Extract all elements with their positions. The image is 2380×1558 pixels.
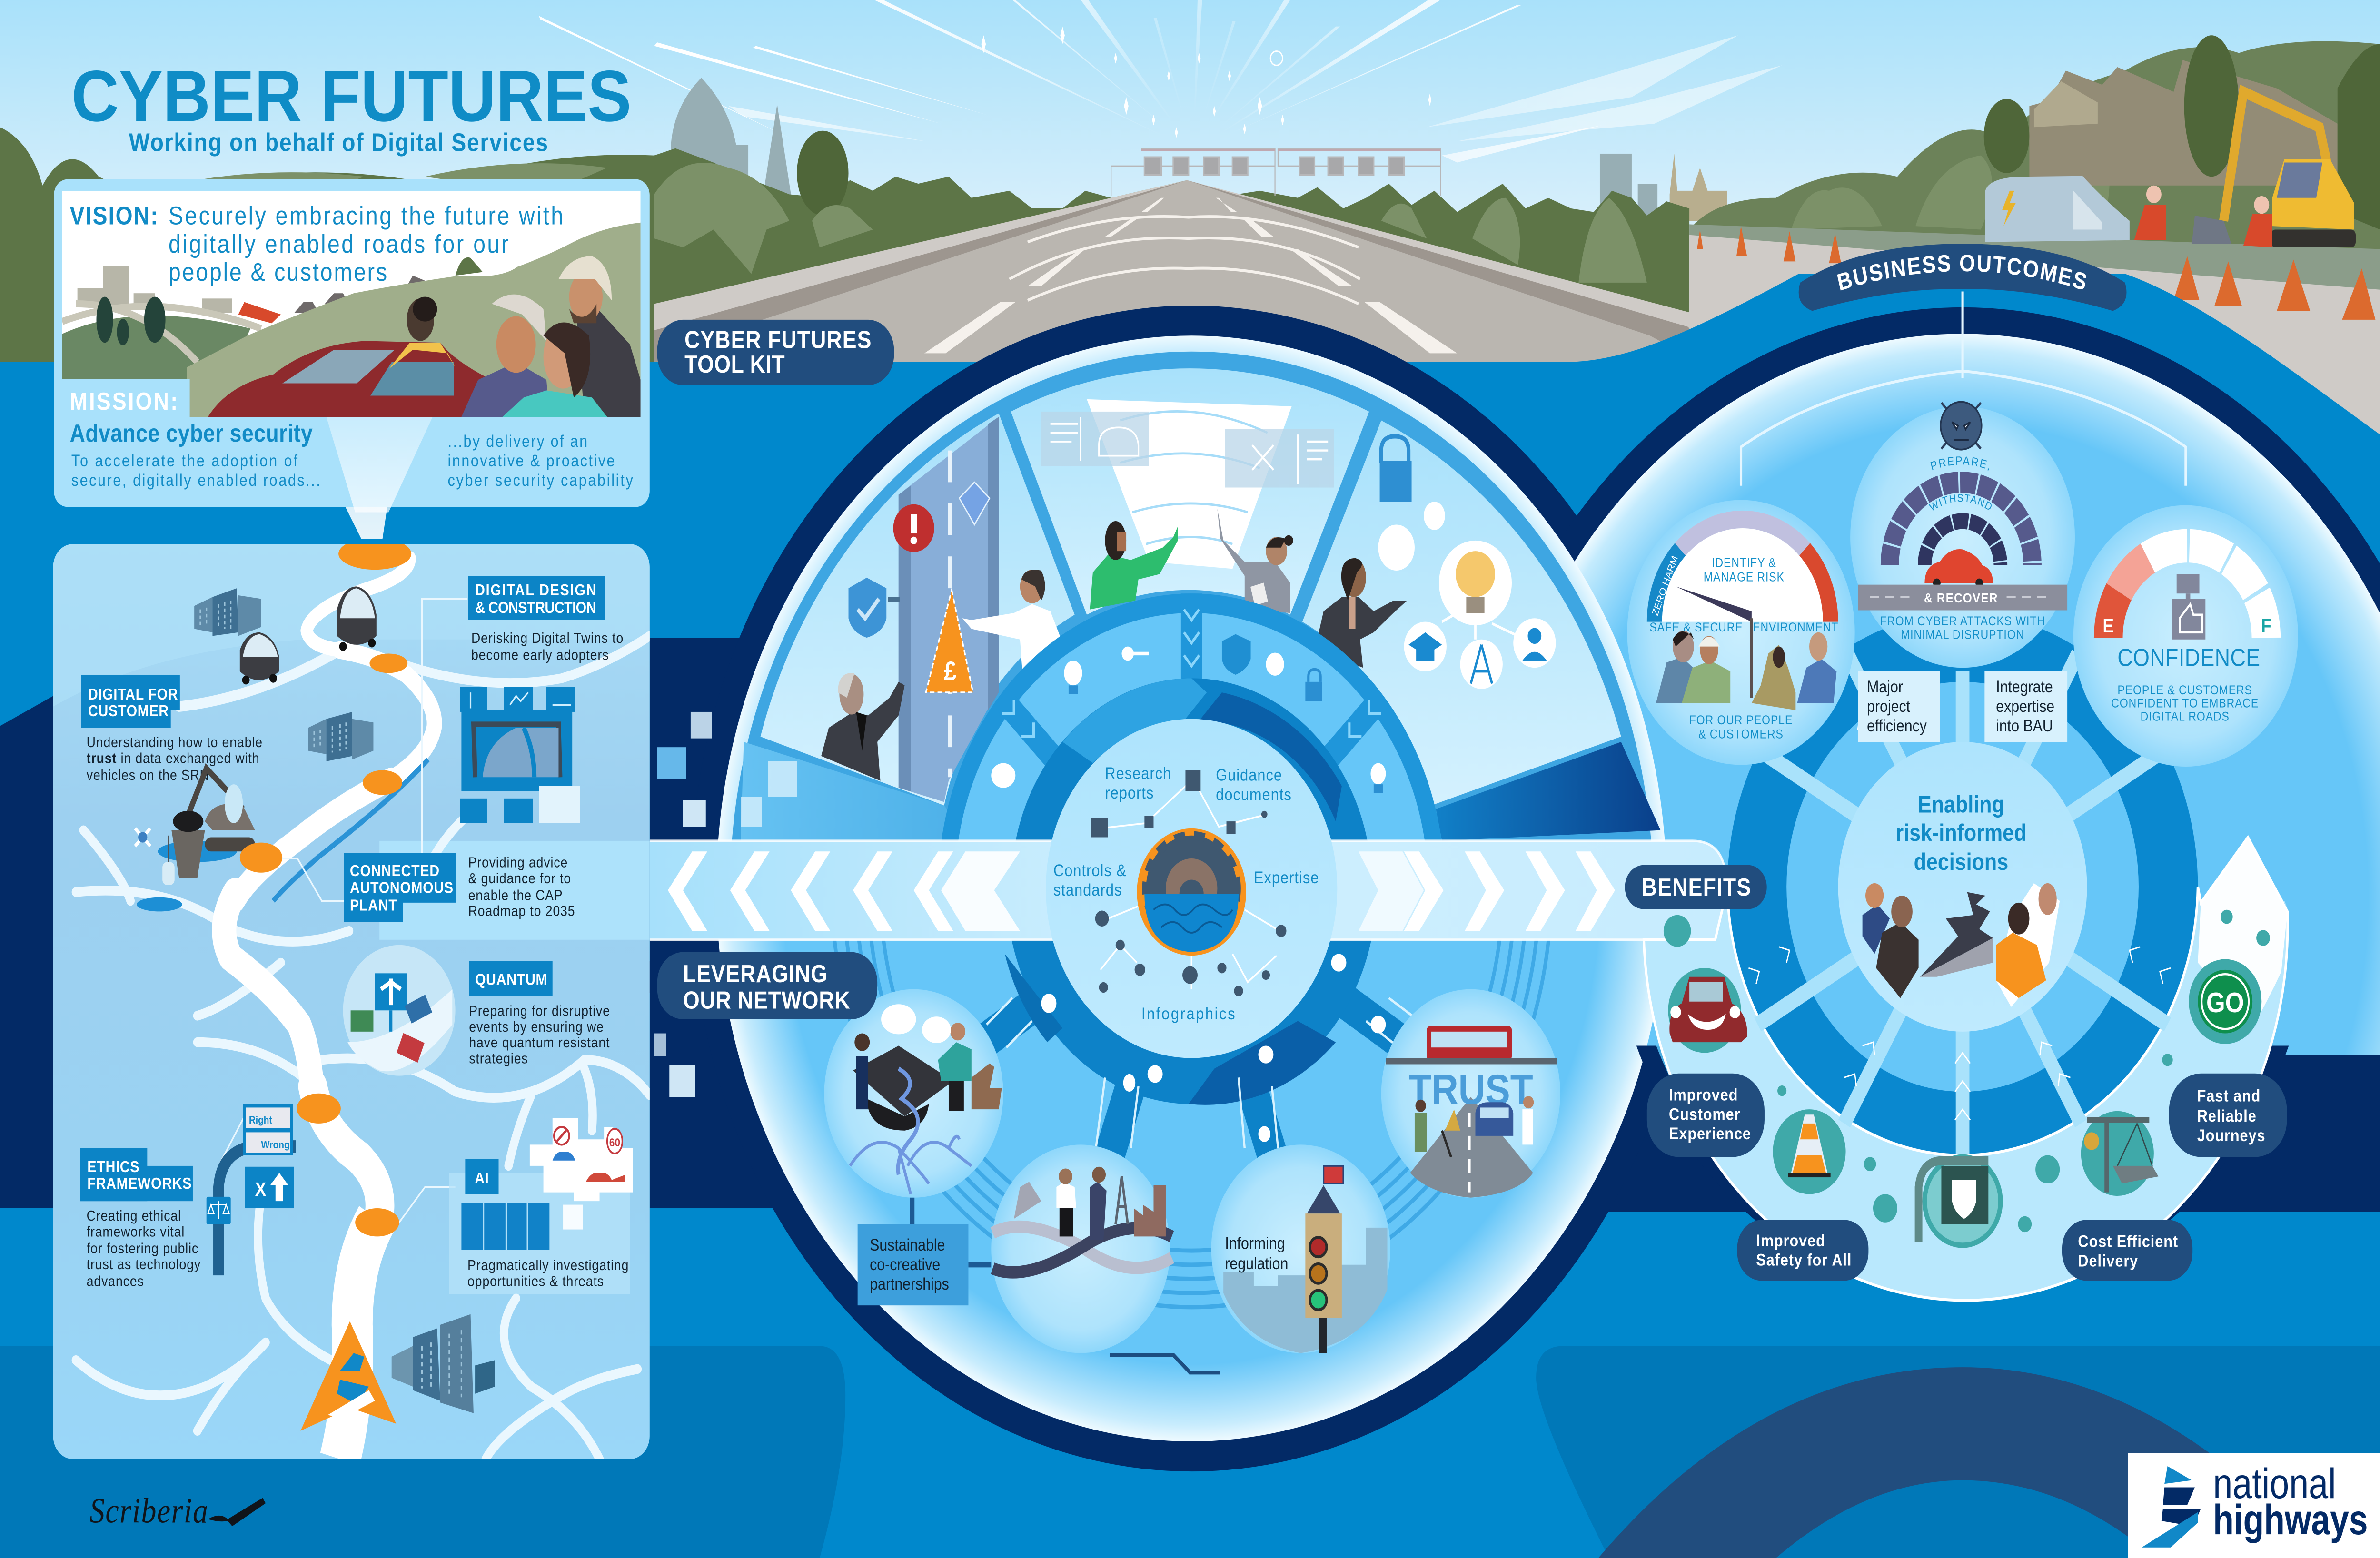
text: CAP roadmap: & guidance for to: [468, 870, 571, 887]
text: mission heading: MISSION:: [70, 388, 178, 415]
illustration: twin model screens: [460, 687, 580, 823]
distant landmarks: dome and spires: [671, 78, 1727, 221]
text: derisking digital twins: become early adopters: [471, 647, 609, 663]
spokes with chevrons: [1758, 653, 2168, 1154]
pill: cost efficient delivery: [2062, 1220, 2192, 1281]
orange route markers: [240, 538, 411, 1236]
pill: cost efficient delivery: Delivery: [2078, 1252, 2138, 1271]
icon: network road roots: [850, 1136, 972, 1194]
box: major project efficiency: efficiency: [1867, 716, 1927, 735]
text: derisking digital twins: Derisking Digital Twins to: [471, 630, 624, 647]
panel: vision and mission: [54, 179, 650, 512]
hub labels: Infographics: [1141, 1005, 1236, 1023]
circle: zero harm gauge: & CUSTOMERS: [1698, 727, 1784, 741]
person: man in dark suit: [821, 682, 905, 781]
panel: left sector, road security: [761, 414, 1075, 806]
illustration: diverse group of people: [1656, 631, 1836, 710]
illustration: quantum junction circle: [343, 945, 456, 1076]
label: leveraging our network: [657, 952, 877, 1019]
circle: confidence gauge: CONFIDENCE: [2117, 644, 2260, 671]
chevron band: [650, 837, 2287, 1264]
benefit icons: [1664, 910, 2270, 1245]
circle: zero harm gauge: MANAGE RISK: [1704, 570, 1785, 584]
icon: mast in circle: [1460, 640, 1503, 689]
right hub structure: decisions: [1914, 848, 2008, 875]
text: mission right: cyber security capability: [448, 471, 633, 489]
bubble: informing regulation: [1211, 1144, 1390, 1353]
connector and box: sustainable partnerships: partnerships: [870, 1274, 949, 1293]
panel: left sector, road security: £: [944, 656, 957, 686]
person: man in white shirt: [962, 604, 1064, 680]
icon: white pixel cloud: [530, 1118, 633, 1201]
pill: improved customer experience: Experience: [1669, 1124, 1751, 1144]
circle: confidence gauge: E: [2103, 616, 2114, 637]
hub labels: reports: [1105, 784, 1154, 802]
white route connectors: [218, 599, 467, 1223]
text: quantum strategies: strategies: [469, 1051, 528, 1067]
circle: zero harm gauge: ENVIRONMENT: [1753, 620, 1838, 634]
icon: tower with traffic light: [1305, 1213, 1342, 1318]
pill: improved customer experience: Improved: [1669, 1085, 1738, 1104]
right-pointing chevrons: [1359, 851, 1615, 931]
sky light rays: [539, 0, 1782, 163]
box: major project efficiency: Major: [1867, 677, 1903, 696]
icon: graduation cap in circle: [1404, 622, 1447, 671]
navigation arrow with logo: [300, 1321, 396, 1431]
text: vision statement: VISION:: [70, 201, 158, 230]
decorative teal dots: [1664, 910, 2270, 1232]
circle: prepare withstand recover: MINIMAL DISRUPTION: [1901, 628, 2024, 642]
circle: confidence gauge: DIGITAL ROADS: [2141, 710, 2230, 724]
van: [1985, 176, 2130, 242]
icon: traffic cone: [1773, 1109, 1846, 1194]
panel: roadmap: [53, 538, 650, 1459]
person: woman in grey pointing: [1217, 509, 1290, 613]
benefit road ring: [1644, 837, 2288, 1301]
node network lines: [1099, 779, 1279, 989]
icon: bus on bridge: [1427, 1026, 1512, 1060]
circle: confidence gauge: [2073, 505, 2298, 767]
text: ethical frameworks: trust as technology: [87, 1256, 201, 1273]
text: quantum strategies: Preparing for disruptive: [469, 1003, 610, 1019]
beam from vision panel to roadmap: [300, 417, 401, 539]
pill: improved safety for all: Improved: [1756, 1232, 1825, 1250]
text: understanding trust in data: vehicles on the SRN: [87, 767, 209, 783]
panel: right sector, people and ideas: [1302, 420, 1661, 841]
logo: national highways: [2128, 1453, 2380, 1558]
pill: fast and reliable journeys: Reliable: [2197, 1107, 2257, 1126]
icon: GO sign: GO: [2206, 986, 2244, 1018]
bubble: trust: [1381, 989, 1560, 1198]
hub labels: documents: [1216, 785, 1292, 804]
main white road: [224, 558, 435, 1459]
icon: shield tick: [849, 578, 886, 638]
text: quantum strategies: events by ensuring we: [469, 1019, 604, 1035]
sky background: [0, 0, 2380, 371]
icon: right and wrong road sign with scales: [207, 1104, 296, 1275]
banner: business outcomes: BUSINESS OUTCOMES: [1835, 250, 2091, 296]
text: vision statement: people & customers: [169, 258, 387, 286]
tag: digital for customer: DIGITAL FOR: [88, 685, 178, 703]
label: benefits: BENEFITS: [1642, 874, 1751, 901]
pill: improved customer experience: Customer: [1669, 1105, 1741, 1124]
decorative data pixels: [565, 712, 797, 1097]
circle: prepare withstand recover: [1850, 402, 2075, 668]
roadworks verge and barrier: [1689, 224, 2380, 459]
central hub of knowledge: [1046, 719, 1337, 1058]
circle: prepare withstand recover: WITHSTAND: [1928, 492, 1994, 514]
bubble: infinity road and partners: [991, 1144, 1172, 1353]
lighter band across panel: [379, 841, 650, 940]
text: understanding trust in data: trust in data exchanged with: [87, 750, 259, 767]
text: mission left: secure, digitally enabled roads...: [71, 471, 320, 489]
hub labels: Controls &: [1053, 861, 1127, 880]
illustration: office buildings middle: [308, 712, 373, 761]
right hub structure: risk-informed: [1895, 819, 2026, 846]
traffic cones on verge: [1697, 226, 2375, 320]
connector and box: sustainable partnerships: Sustainable: [870, 1235, 945, 1254]
road shadow edge: [273, 759, 428, 901]
tag: digital for customer: CUSTOMER: [88, 702, 169, 720]
pill: improved safety for all: Safety for All: [1756, 1251, 1852, 1270]
circle: prepare withstand recover: PREPARE,: [1929, 454, 1993, 473]
box: integrate expertise into BAU: [1984, 671, 2067, 742]
hub labels: Guidance: [1216, 766, 1282, 785]
excavator and road workers: [2134, 92, 2356, 247]
text: CAP roadmap: Providing advice: [468, 855, 568, 871]
circle: confidence gauge: F: [2261, 616, 2271, 637]
tag: quantum: QUANTUM: [475, 970, 547, 988]
panel: AI: AI: [475, 1169, 489, 1187]
circle: zero harm gauge: FOR OUR PEOPLE: [1689, 713, 1793, 727]
pill: improved safety for all: [1737, 1220, 1868, 1281]
tag: ethics frameworks: ETHICS: [87, 1158, 139, 1175]
text: ethical frameworks: for fostering public: [87, 1241, 198, 1257]
left-pointing chevrons: [668, 851, 1020, 931]
label: cyber futures tool kit: CYBER FUTURES: [684, 326, 871, 354]
tag: digital design and construction: & CONSTRUCTION: [475, 599, 596, 617]
signature: Scriberia: Scriberia: [89, 1491, 208, 1530]
text: informing regulation: Informing: [1225, 1233, 1285, 1252]
tag: connected autonomous plant: CONNECTED: [350, 862, 440, 880]
icon: person in circle: [1513, 618, 1556, 668]
tag: connected autonomous plant: AUTONOMOUS: [350, 878, 454, 897]
wedge under left sector: [741, 742, 972, 841]
business outcomes dome: [1457, 307, 2380, 1055]
illustration: autonomous pods: [240, 586, 377, 684]
illustration: vision scene: [62, 191, 641, 417]
circle: confidence gauge: CONFIDENT TO EMBRACE: [2111, 696, 2259, 710]
circle: confidence gauge: PEOPLE & CUSTOMERS: [2118, 683, 2252, 697]
icon: light bulb in circle: [1439, 541, 1512, 625]
tag: ethics frameworks: [80, 1148, 193, 1201]
circle: zero harm gauge: ZERO HARM: [1650, 554, 1680, 618]
icon: smiling car: [1668, 968, 1747, 1053]
hub labels: Research: [1105, 764, 1171, 783]
text: understanding trust in data: Understanding how to enable: [87, 734, 263, 751]
icon: padlock: [1381, 436, 1408, 463]
label: cyber futures tool kit: [657, 320, 894, 385]
motorway road: [654, 180, 1730, 371]
person: woman in green pointing: [1090, 526, 1178, 610]
icons on ring: bulbs, keys, shields, locks: [991, 634, 1386, 793]
icon: data screen with vehicle: [1041, 412, 1149, 466]
text: ethical frameworks: frameworks vital: [87, 1224, 185, 1240]
text: ethical frameworks: Creating ethical: [87, 1208, 181, 1224]
hub labels: [1053, 764, 1319, 1023]
person: woman in dark suit: [1316, 597, 1407, 668]
text: vision statement: digitally enabled roads for our: [169, 230, 508, 258]
text: mission left: To accelerate the adoption of: [71, 451, 298, 470]
panel: AI: 60: [609, 1136, 620, 1149]
pill: fast and reliable journeys: Journeys: [2197, 1126, 2265, 1145]
text: vision statement: Securely embracing the future with: [169, 201, 563, 230]
icon: right and wrong road sign with scales: Wrong: [261, 1139, 290, 1151]
tag: digital for customer: [81, 675, 180, 728]
text: quantum strategies: have quantum resistant: [469, 1035, 610, 1051]
label: cyber futures tool kit: TOOL KIT: [684, 351, 785, 378]
icon: gear and brain: [1137, 828, 1246, 956]
overhead gantries: [1111, 148, 1440, 196]
illustration: people around logo: [1863, 883, 2060, 1007]
navy background band: [0, 638, 2380, 1212]
circle: zero harm gauge: [1627, 500, 1855, 765]
hub labels: Expertise: [1254, 868, 1319, 887]
tool kit circle: [716, 335, 1666, 1441]
road squiggle: [1110, 1355, 1220, 1372]
tool kit circle outline: [691, 306, 1692, 1471]
right hub structure: Enabling: [1918, 791, 2004, 818]
pill: cost efficient delivery: Cost Efficient: [2078, 1233, 2178, 1251]
connector and box: sustainable partnerships: co-creative: [870, 1255, 940, 1273]
icon: diamond: [959, 482, 990, 524]
panel: AI: [449, 1118, 633, 1294]
signature: Scriberia: [89, 1491, 266, 1530]
houses and tall trees behind the works site: [1984, 35, 2380, 230]
logo: national highways: highways: [2213, 1496, 2368, 1543]
bubble: co-creative partnerships: [824, 989, 1003, 1198]
tag: digital design and construction: DIGITAL DESIGN: [475, 581, 596, 599]
right hub structure: [1609, 475, 2316, 1301]
illustration: office buildings bottom: [392, 1314, 495, 1413]
bubble: trust: TRUST: [1408, 1066, 1533, 1113]
tag: digital design and construction: [468, 576, 605, 620]
text: mission right: innovative & proactive: [448, 451, 615, 470]
box: integrate expertise into BAU: Integrate: [1996, 677, 2053, 696]
text: advance cyber security: Advance cyber security: [70, 420, 313, 447]
pill: fast and reliable journeys: Fast and: [2197, 1086, 2261, 1105]
icon: data screen with drone: [1225, 429, 1334, 488]
hub: enabling risk-informed decisions: [1838, 742, 2087, 1032]
tag: quantum: [469, 961, 553, 996]
label: leveraging our network: LEVERAGING: [683, 960, 827, 988]
icon: servers: [461, 1203, 549, 1250]
icon: fuel pump thumbs up: [2177, 574, 2200, 593]
icon: blue car and pedestrians: [1475, 1102, 1513, 1136]
box: major project efficiency: project: [1867, 697, 1910, 715]
banner: business outcomes: [1799, 244, 2126, 311]
circle: zero harm gauge: SAFE & SECURE: [1649, 620, 1743, 634]
connector: outcomes bracket: [1741, 291, 2186, 486]
icon: warning circle: [893, 504, 934, 552]
lower background bands: [0, 1346, 2380, 1558]
icon: right and wrong road sign with scales: Right: [249, 1114, 272, 1126]
icon: white road with signal waves: [1087, 399, 1292, 569]
tree line right of the road: [1214, 41, 2380, 335]
circle: prepare withstand recover: FROM CYBER ATTACKS WITH: [1880, 614, 2045, 628]
label: benefits: [1625, 865, 1767, 909]
box: major project efficiency: [1858, 671, 1940, 742]
circle: prepare withstand recover: & RECOVER: [1924, 590, 1998, 605]
label: leveraging our network: OUR NETWORK: [683, 986, 850, 1014]
tag: connected autonomous plant: PLANT: [350, 897, 397, 914]
text: pragmatically investigating: Pragmatically investigating: [467, 1257, 629, 1273]
icon: road strip: [899, 417, 999, 802]
text: CAP roadmap: enable the CAP: [468, 887, 563, 904]
icon: cyber threat bug: [1941, 402, 1982, 450]
tag: connected autonomous plant: [344, 853, 456, 922]
inner ring of the tool kit: [942, 593, 1441, 839]
secondary roads: [76, 636, 650, 1459]
icon: jigsaw arches and car: [1890, 482, 2033, 565]
tag: ethics frameworks: FRAMEWORKS: [87, 1174, 192, 1193]
tag: AI: [465, 1159, 499, 1194]
text: CAP roadmap: Roadmap to 2035: [468, 903, 575, 919]
circle: zero harm gauge: IDENTIFY &: [1712, 556, 1776, 570]
title: Working on behalf of Digital Services: [129, 128, 548, 157]
icon: crane with pound: [2081, 1111, 2158, 1196]
pill: fast and reliable journeys: [2169, 1074, 2287, 1157]
panel: middle sector, connected vehicles: [1011, 368, 1369, 615]
text: pragmatically investigating: opportunities & threats: [467, 1273, 604, 1290]
icon: right and wrong road sign with scales: X: [255, 1179, 267, 1201]
logo: national highways: national: [2213, 1459, 2336, 1507]
tree line left of the road: [0, 127, 1187, 362]
icons: small speech bubbles on arms: [1041, 954, 1386, 1142]
icon: shield sign: [1919, 1157, 2001, 1245]
title: CYBER FUTURES: [71, 56, 632, 137]
icon: orange cone with pound: [926, 590, 973, 692]
box: integrate expertise into BAU: into BAU: [1996, 716, 2053, 735]
box: integrate expertise into BAU: expertise: [1996, 697, 2054, 715]
pill: improved customer experience: [1647, 1074, 1765, 1157]
sky sparkles: [982, 27, 1431, 138]
icon: speech bubbles: [1378, 524, 1415, 571]
illustration: excavator, drone and robot: [135, 769, 255, 911]
text: informing regulation: regulation: [1225, 1254, 1288, 1273]
illustration: office buildings top: [194, 588, 261, 636]
text: mission right: ...by delivery of an: [448, 432, 587, 451]
icon: GO sign: [2189, 959, 2261, 1044]
arms from hub to network bubbles: [833, 940, 1550, 1310]
text: ethical frameworks: advances: [87, 1273, 144, 1290]
hub labels: standards: [1053, 881, 1122, 900]
connector and box: sustainable partnerships: [858, 1198, 991, 1305]
